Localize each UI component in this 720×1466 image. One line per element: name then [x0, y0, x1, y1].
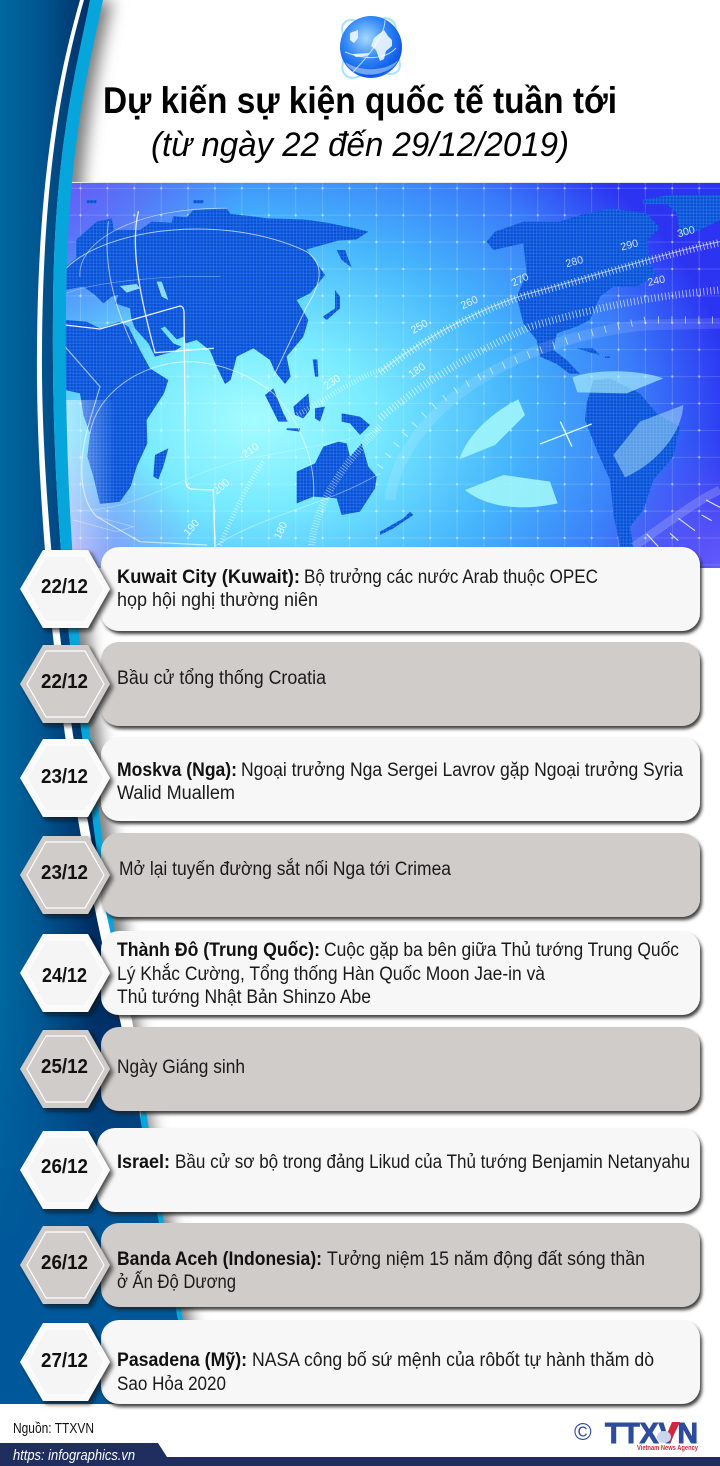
event row 1 [20, 547, 700, 631]
scale labels [407, 224, 696, 381]
event row 9: NASA công bố sứ mệnh của rôbốt tự hành thăm dò [252, 1350, 654, 1371]
event row 6 [20, 1027, 700, 1111]
event row 5: Thủ tướng Nhật Bản Shinzo Abe [117, 987, 371, 1008]
event row 9 [20, 1320, 700, 1404]
event row 5: Thành Đô (Trung Quốc): [117, 940, 320, 961]
event row 8: Banda Aceh (Indonesia): [117, 1249, 322, 1270]
event row 5 [20, 931, 700, 1015]
cyan stripe [53, 0, 200, 1404]
subtitle: (từ ngày 22 đến 29/12/2019) [151, 126, 569, 164]
source: Nguồn: TTXVN [13, 1420, 94, 1437]
scale labels: 200 [211, 477, 232, 497]
event row 8: 26/12 [41, 1252, 88, 1274]
scale labels: 180 [272, 520, 290, 541]
event row 1: họp hội nghị thường niên [117, 590, 318, 611]
footer url: https: infographics.vn [13, 1447, 135, 1464]
logo: TTXVN [574, 1418, 698, 1452]
scale labels [181, 372, 343, 541]
icon: globe [333, 9, 408, 87]
event row 2: 22/12 [41, 671, 88, 693]
event row 4 [20, 833, 700, 917]
left curved band [0, 0, 200, 1404]
event row 4: 23/12 [41, 862, 88, 884]
title: Dự kiến sự kiện quốc tế tuần tới [103, 80, 617, 121]
scale labels: 280 [564, 254, 585, 270]
event row 8 [20, 1223, 700, 1307]
event row 1: Bộ trưởng các nước Arab thuộc OPEC [304, 567, 598, 588]
event row 3: Walid Muallem [117, 783, 235, 804]
scale labels: 240 [646, 273, 666, 289]
scale labels: 210 [240, 441, 261, 461]
banner top edge [60, 182, 720, 183]
event row 6: Ngày Giáng sinh [117, 1057, 245, 1078]
event row 9: Pasadena (Mỹ): [117, 1350, 247, 1371]
event row 7: Israel: [117, 1152, 170, 1173]
event row 3: 23/12 [41, 766, 88, 788]
event row 8: Tưởng niệm 15 năm động đất sóng thần [327, 1249, 645, 1270]
event row 3: Ngoại trưởng Nga Sergei Lavrov gặp Ngoại trưởng Syria [241, 760, 683, 781]
scale labels: 190 [181, 517, 202, 539]
banner: world map [60, 183, 720, 568]
logo: TTXVN: Vietnam News Agency [637, 1445, 698, 1452]
band shadow [60, 0, 205, 1404]
event row 2 [20, 642, 700, 726]
logo: TTXVN: TTXVN [605, 1418, 698, 1450]
event row 5: Cuộc gặp ba bên giữa Thủ tướng Trung Quốc [324, 940, 679, 961]
event row 4: Mở lại tuyến đường sắt nối Nga tới Crimea [119, 858, 451, 880]
event row 2: Bầu cử tổng thống Croatia [117, 668, 326, 689]
event row 9: 27/12 [41, 1350, 88, 1372]
event row 5: 24/12 [42, 965, 87, 987]
event row 5: Lý Khắc Cường, Tổng thống Hàn Quốc Moon Jae-in và [117, 963, 545, 985]
white stripe [37, 0, 141, 1117]
event row 9: Sao Hỏa 2020 [117, 1374, 226, 1395]
event row 1: Kuwait City (Kuwait): [117, 567, 300, 588]
logo: TTXVN: © [574, 1419, 592, 1446]
event row 3 [20, 737, 700, 821]
event row 7: 26/12 [41, 1156, 88, 1178]
event row 7 [20, 1128, 700, 1212]
scale labels: 270 [510, 271, 531, 289]
footer bar [0, 1443, 720, 1466]
scale labels: 180 [407, 361, 428, 381]
scale labels: 300 [676, 224, 696, 240]
map: Europe, Asia, Africa, Australia [65, 200, 380, 547]
event row 6: 25/12 [41, 1056, 88, 1078]
scale labels: 250 [409, 317, 430, 337]
scale labels: 260 [459, 294, 480, 312]
scale labels: 290 [619, 237, 640, 254]
map: Americas [380, 195, 720, 547]
event row 8: ở Ấn Độ Dương [117, 1271, 236, 1293]
scale labels: 230 [322, 372, 343, 392]
event row 1: 22/12 [41, 576, 88, 598]
event row 3: Moskva (Nga): [117, 760, 237, 781]
